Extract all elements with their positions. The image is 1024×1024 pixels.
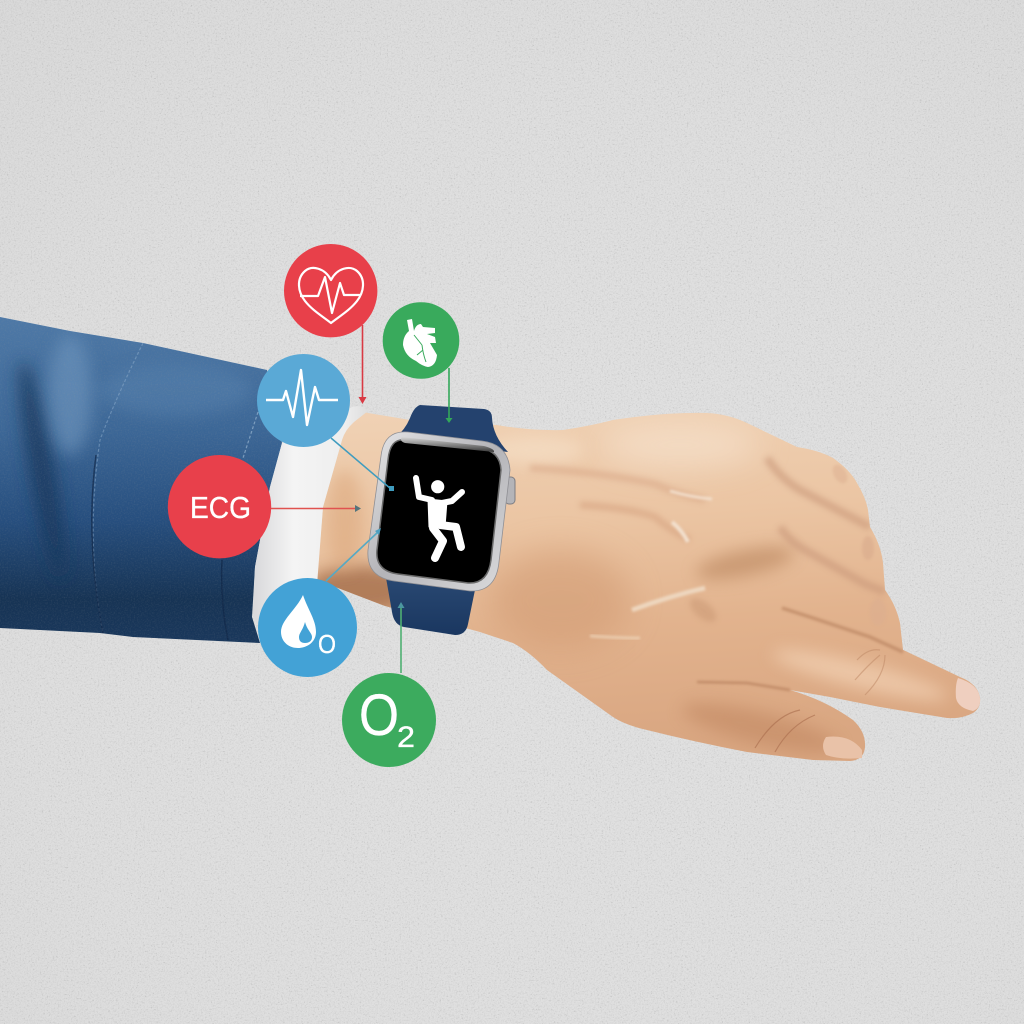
connector: ECG line xyxy=(271,505,361,512)
icon: heart rate xyxy=(284,244,377,337)
icon: oxygen O2: 2 xyxy=(397,721,415,754)
watch case xyxy=(368,432,510,591)
fingernail: index xyxy=(956,678,980,711)
connector: red heart-rate line xyxy=(358,325,366,404)
fingernail: thumb xyxy=(823,737,862,759)
watch: top band xyxy=(395,405,508,452)
dancing figure icon xyxy=(416,478,462,558)
watch screen xyxy=(377,440,501,583)
connector: oxygen line xyxy=(398,602,404,673)
connector: water drop line xyxy=(326,528,381,581)
hand shading and veins xyxy=(305,423,950,763)
icon: oxygen O2 xyxy=(342,673,436,767)
hand and wrist xyxy=(305,411,980,763)
watch crown xyxy=(505,477,515,504)
icon: oxygen O2: O xyxy=(359,683,399,748)
connector: blue pulse line xyxy=(331,438,394,491)
icon: ECG badge xyxy=(168,455,271,558)
icon: water drop O: O xyxy=(318,629,336,659)
connector: green heart line xyxy=(446,368,452,423)
screen highlight xyxy=(401,437,494,452)
icon: ECG badge: ECG xyxy=(190,490,251,525)
icon: pulse waveform xyxy=(257,354,350,447)
shirt sleeve xyxy=(0,310,290,650)
watch: bottom band xyxy=(386,578,476,635)
icon: anatomical heart xyxy=(383,302,459,379)
white shirt cuff xyxy=(253,406,368,628)
icon: water drop O xyxy=(258,578,357,677)
